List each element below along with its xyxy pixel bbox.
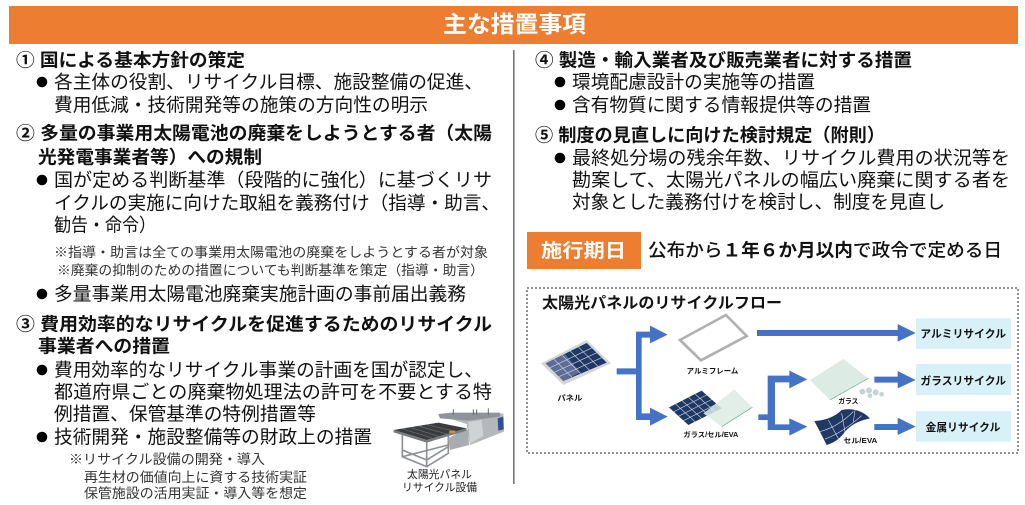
icon: solar panel <box>541 340 611 385</box>
flow diagram <box>541 315 1011 445</box>
section 3 first bullet: 費用効率的なリサイクル事業の計画を国が認定し、 <box>54 360 483 380</box>
section 2 second bullet: 多量事業用太陽電池廃棄実施計画の事前届出義務 <box>54 284 466 304</box>
box: aluminium recycling: アルミリサイクル <box>920 328 1006 341</box>
section 4: manufacturers <box>535 50 912 116</box>
icon: glass <box>810 359 884 400</box>
section 1: basic policy <box>16 50 483 116</box>
section 3 second bullet: 技術開発・施設整備等の財政上の措置 <box>54 426 372 448</box>
arrow: panel split <box>617 326 668 426</box>
arrow: to aluminium recycling <box>757 324 916 342</box>
arrow: to glass recycling <box>874 371 916 388</box>
label: glass: ガラス <box>838 397 858 406</box>
section 2 notes: ※廃棄の抑制のための措置についても判断基準を策定（指導・助言） <box>57 262 484 278</box>
icon: recycling equipment <box>394 408 504 467</box>
section 2 notes: ※指導・助言は全ての事業用太陽電池の廃棄をしようとする者が対象 <box>54 245 488 260</box>
section 3 notes: ※リサイクル設備の開発・導入 <box>69 452 266 467</box>
box: glass recycling <box>916 364 1011 395</box>
heading 3: 事業者への措置 <box>38 336 170 356</box>
section 5 bullet: 最終処分場の残余年数、リサイクル費用の状況等を <box>572 148 1010 168</box>
heading 1: ① 国による基本方針の策定 <box>16 50 245 70</box>
flow title: 太陽光パネルのリサイクルフロー <box>542 294 782 312</box>
box: aluminium recycling <box>916 318 1011 349</box>
section 3: recycling operators <box>16 314 492 501</box>
section 5 bullet: 勘案して、太陽光パネルの幅広い廃棄に関する者を <box>572 170 1010 190</box>
label: aluminium frame: アルミフレーム <box>687 366 738 375</box>
section 2 first bullet: 勧告・命令） <box>54 214 156 236</box>
icon: cell and EVA <box>814 409 870 445</box>
heading 2 <box>16 122 492 168</box>
section 5: review clause <box>535 124 1010 212</box>
heading 2: ② 多量の事業用太陽電池の廃棄をしようとする者（太陽 <box>16 122 492 144</box>
box: metal recycling: 金属リサイクル <box>926 420 1000 434</box>
label: recycling equipment: リサイクル設備 <box>402 481 477 494</box>
section 3 first bullet <box>37 360 492 424</box>
section 4 bullets: 含有物質に関する情報提供等の措置 <box>572 94 871 116</box>
enforcement date text: 公布から１年６か月以内で政令で定める日 <box>648 240 1002 260</box>
section 2: regulation of disposers <box>16 122 500 304</box>
section 5 bullet <box>555 148 1010 212</box>
title banner: 主な措置事項 <box>443 11 586 37</box>
box: metal recycling <box>916 411 1011 442</box>
section 2 notes <box>54 245 488 278</box>
label: panel: パネル <box>557 393 583 403</box>
section 4 bullets: 環境配慮設計の実施等の措置 <box>572 72 815 92</box>
section 1 bullet text: 各主体の役割、リサイクル目標、施設整備の促進、 <box>54 72 483 92</box>
icon: glass, cell and EVA <box>669 389 752 427</box>
section 3 notes: 保管施設の活用実証・導入等を想定 <box>84 485 307 501</box>
section 3 first bullet: 都道府県ごとの廃棄物処理法の許可を不要とする特 <box>54 382 492 402</box>
section 5 bullet: 対象とした義務付けを検討し、制度を見直し <box>572 192 945 212</box>
enforcement date badge <box>527 232 641 269</box>
heading 3: ③ 費用効率的なリサイクルを促進するためのリサイクル <box>16 314 492 334</box>
label: glass cell EVA: ガラス/セル/EVA <box>683 430 738 439</box>
icon: aluminium frame <box>680 315 747 360</box>
arrow: to metal recycling <box>874 418 916 435</box>
section 2 first bullet: 国が定める判断基準（段階的に強化）に基づくリサ <box>54 170 492 190</box>
enforcement date badge: 施行期日 <box>541 240 626 262</box>
section 3 notes <box>69 452 308 501</box>
panel: recycling flow <box>527 288 1018 453</box>
section 3 notes: 再生材の価値向上に資する技術実証 <box>84 470 308 485</box>
section 3 first bullet: 例措置、保管基準の特例措置等 <box>54 404 316 424</box>
heading 3 <box>16 314 492 356</box>
section 4 bullets <box>555 72 871 116</box>
heading 2: 光発電事業者等）への規制 <box>38 146 262 168</box>
heading 5: ⑤ 制度の見直しに向けた検討規定（附則） <box>535 124 885 146</box>
section 1 bullet text: 費用低減・技術開発等の施策の方向性の明示 <box>54 94 428 116</box>
box: glass recycling: ガラスリサイクル <box>920 373 1006 387</box>
heading 4: ④ 製造・輸入業者及び販売業者に対する措置 <box>535 50 912 70</box>
title banner <box>9 6 1018 44</box>
label: cell EVA: セル/EVA <box>843 437 877 445</box>
label: recycling equipment <box>402 467 477 494</box>
section 2 first bullet: イクルの実施に向けた取組を義務付け（指導・助言、 <box>54 192 500 214</box>
section 2 first bullet <box>37 170 500 236</box>
arrow: second split <box>758 371 807 436</box>
section 1 bullet text <box>37 72 483 116</box>
label: recycling equipment: 太陽光パネル <box>407 467 472 481</box>
